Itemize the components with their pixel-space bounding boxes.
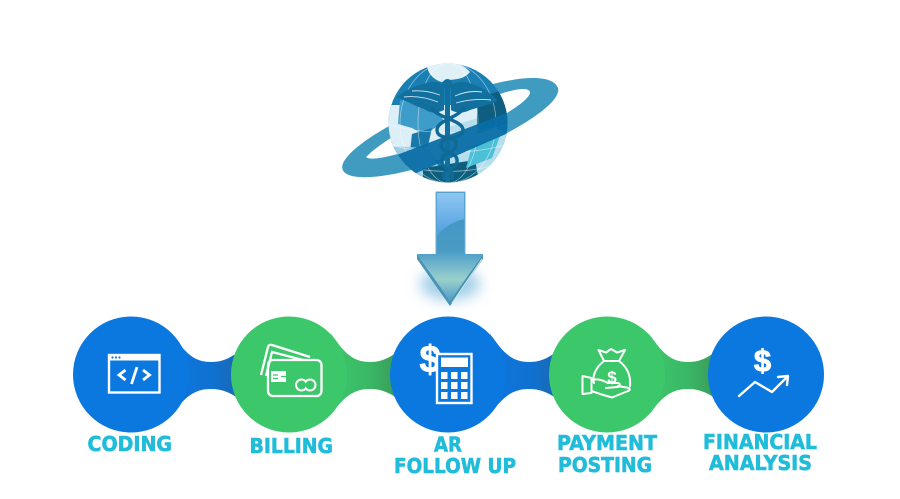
icon: dollar and rising chart bbox=[739, 343, 788, 396]
process chain bbox=[73, 316, 824, 478]
logo: globe with caduceus and ring bbox=[342, 63, 558, 186]
snakes bbox=[431, 107, 463, 180]
label: payment posting: PAYMENT bbox=[557, 431, 657, 455]
ring: front band bbox=[398, 113, 508, 174]
arrow shadow bbox=[420, 268, 480, 300]
label: payment posting: POSTING bbox=[558, 453, 652, 477]
step: financial analysis bbox=[703, 316, 824, 475]
label: ar follow up: AR bbox=[434, 432, 462, 456]
globe bbox=[388, 64, 508, 182]
arrow head bbox=[417, 253, 483, 301]
label: financial analysis: ANALYSIS bbox=[709, 451, 812, 475]
label: financial analysis: FINANCIAL bbox=[703, 430, 817, 454]
label: payment posting bbox=[557, 431, 657, 477]
step: billing bbox=[231, 316, 347, 458]
label: coding: CODING bbox=[88, 432, 172, 456]
icon: money bag in hand bbox=[582, 349, 630, 398]
step: ar follow up bbox=[390, 316, 516, 478]
step: coding bbox=[73, 316, 189, 456]
icon: dollar and rising chart: $ bbox=[754, 343, 771, 378]
icon: dollar and calculator bbox=[420, 339, 472, 403]
wings bbox=[397, 82, 498, 113]
arrow shaft bbox=[436, 192, 465, 255]
icon: credit cards bbox=[261, 345, 322, 396]
arrow pointing down bbox=[417, 192, 483, 306]
connector: payment to financial bbox=[649, 334, 727, 414]
step: payment posting bbox=[549, 316, 665, 477]
label: billing: BILLING bbox=[250, 434, 333, 458]
icon: code window bbox=[109, 355, 160, 392]
icon: money bag in hand: $ bbox=[607, 368, 617, 387]
caduceus bbox=[397, 79, 498, 182]
label: ar follow up: FOLLOW UP bbox=[394, 454, 516, 478]
ring: back bbox=[342, 78, 558, 177]
staff bbox=[445, 84, 450, 182]
connector: ar to payment bbox=[490, 334, 568, 414]
connector: coding to billing bbox=[172, 334, 250, 414]
label: financial analysis bbox=[703, 430, 817, 475]
icon: dollar and calculator: $ bbox=[420, 339, 440, 381]
connector: billing to ar bbox=[331, 334, 409, 414]
label: ar follow up bbox=[394, 432, 516, 478]
